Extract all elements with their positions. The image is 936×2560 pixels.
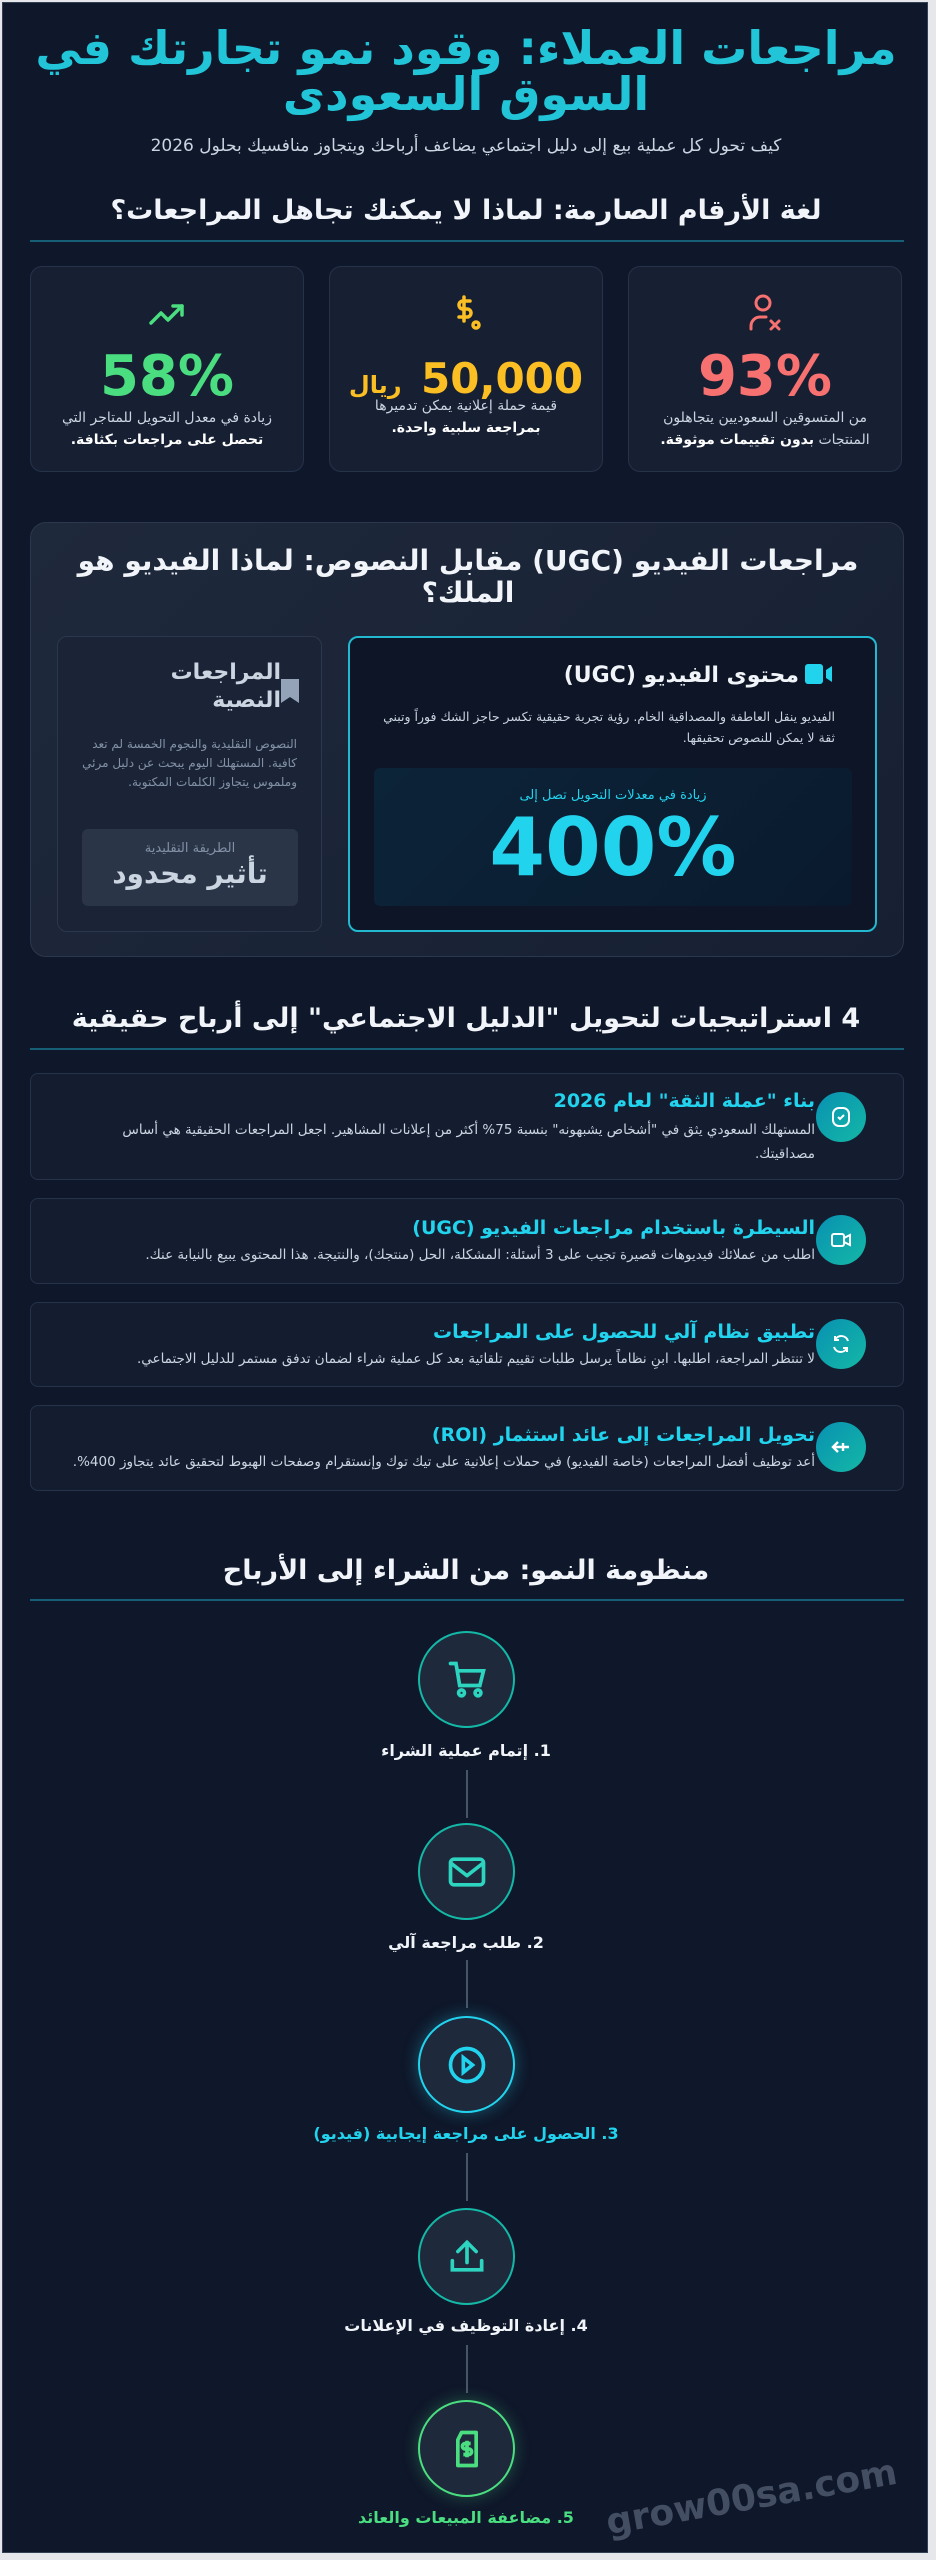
heading: strategies: 4 استراتيجيات لتحويل "الدليل الاجتماعي" إلى أرباح حقيقية (72, 1003, 860, 1034)
heading: numbers: لغة الأرقام الصارمة: لماذا لا يمكنك تجاهل المراجعات؟ (110, 195, 822, 226)
stat card: 93%: من المتسوقين السعوديين يتجاهلون المنتجات بدون تقييمات موثوقة. (660, 410, 870, 448)
strategy 4 (30, 1405, 904, 1491)
strategy 1: بناء "عملة الثقة" لعام 2026 (554, 1090, 815, 1112)
icon: shield check (816, 1092, 866, 1142)
strategy 2: السيطرة باستخدام مراجعات الفيديو (UGC) (412, 1217, 815, 1239)
watermark: grow00sa.com (603, 2452, 900, 2543)
icon: user x (750, 294, 781, 331)
step 5: revenue (418, 2400, 515, 2497)
stat card: 58% (30, 266, 304, 472)
stat card: 50,000: 50,000 ريال (349, 354, 583, 403)
stat card: 58%: زيادة في معدل التحويل للمتاجر التي تحصل على مراجعات بكثافة. (62, 410, 272, 448)
step 3: video review (418, 2016, 515, 2113)
strategy 2: اطلب من عملائك فيديوهات قصيرة تجيب على 3 أسئلة: المشكلة، الحل (منتجك)، والنتيجة. هذا المحتوى يبيع بالنيابة عنك. (145, 1247, 815, 1263)
heading: growth system: منظومة النمو: من الشراء إلى الأرباح (223, 1555, 709, 1586)
stat card: 50,000: بمراجعة سلبية واحدة. (391, 420, 541, 436)
400% box: زيادة في معدلات التحويل تصل إلى (519, 788, 707, 803)
strategy 1 (30, 1073, 904, 1180)
stat card: 93% (628, 266, 902, 472)
limited impact box (82, 829, 298, 906)
strategy 1: المستهلك السعودي يثق في "أشخاص يشبهونه" بنسبة 75% أكثر من إعلانات المشاهير. اجعل المراجعات الحقيقية هي أساس مصداقيتك. (122, 1122, 815, 1162)
400% box: 400% (489, 801, 737, 894)
heading: video vs text: مراجعات الفيديو (UGC) مقابل النصوص: لماذا الفيديو هو الملك؟ (78, 544, 858, 609)
panel: video vs text (30, 522, 904, 957)
step 1: purchase (418, 1631, 515, 1728)
icon: arrows (816, 1422, 866, 1472)
card: text reviews (57, 636, 322, 932)
stat card: 93%: 93% (698, 344, 832, 409)
limited impact box: تأثير محدود (112, 857, 268, 890)
step 4: reuse in ads (418, 2208, 515, 2305)
strategy 3: لا تنتظر المراجعة، اطلبها. ابنِ نظاماً يرسل طلبات تقييم تلقائية بعد كل عملية شراء لضمان تدفق مستمر للدليل الاجتماعي. (137, 1351, 815, 1367)
stat card: 50,000 (329, 266, 603, 472)
limited impact box: الطريقة التقليدية (145, 841, 235, 856)
stat card: 58%: 58% (100, 344, 234, 409)
subtitle: كيف تحول كل عملية بيع إلى دليل اجتماعي يضاعف أرباحك ويتجاوز منافسيك بحلول 2026 (151, 136, 781, 156)
stat card: 50,000: قيمة حملة إعلانية يمكن تدميرها (375, 398, 557, 414)
strategy 4: تحويل المراجعات إلى عائد استثمار (ROI) (432, 1424, 815, 1446)
title: مراجعات العملاء: وقود نمو تجارتك في السوق السعودى (35, 21, 897, 121)
strategy 4: أعد توظيف أفضل المراجعات (خاصة الفيديو) في حملات إعلانية على تيك توك وإنستقرام وصفحات الهبوط لتحقيق عائد يتجاوز 400%. (73, 1454, 815, 1470)
strategy 3 (30, 1302, 904, 1387)
icon: money (457, 295, 481, 330)
label 3: 3. الحصول على مراجعة إيجابية (فيديو) (313, 2124, 619, 2143)
label 1: 1. إتمام عملية الشراء (381, 1741, 551, 1760)
UGC heading with icon: محتوى الفيديو (UGC) (564, 663, 799, 688)
text description: النصوص التقليدية والنجوم الخمسة لم تعد كافية. المستهلك اليوم يبحث عن دليل مرئي وملموس يتجاوز الكلمات المكتوبة. (82, 737, 297, 789)
icon: video (816, 1215, 866, 1265)
card: UGC video (348, 636, 877, 932)
icon: refresh (816, 1319, 866, 1369)
label 5: 5. مضاعفة المبيعات والعائد (358, 2508, 574, 2527)
400% box (374, 768, 852, 906)
strategy 3: تطبيق نظام آلي للحصول على المراجعات (433, 1321, 815, 1343)
step 2: review request (418, 1823, 515, 1920)
UGC description: الفيديو ينقل العاطفة والمصداقية الخام. رؤية تجربة حقيقية تكسر حاجز الشك فوراً وتبني ثقة لا يمكن للنصوص تحقيقها. (383, 709, 835, 745)
label 4: 4. إعادة التوظيف في الإعلانات (344, 2316, 588, 2335)
text heading with bookmark icon: المراجعات النصية (171, 660, 281, 713)
strategy 2 (30, 1198, 904, 1284)
icon: trending up (149, 304, 184, 325)
label 2: 2. طلب مراجعة آلي (388, 1933, 544, 1952)
